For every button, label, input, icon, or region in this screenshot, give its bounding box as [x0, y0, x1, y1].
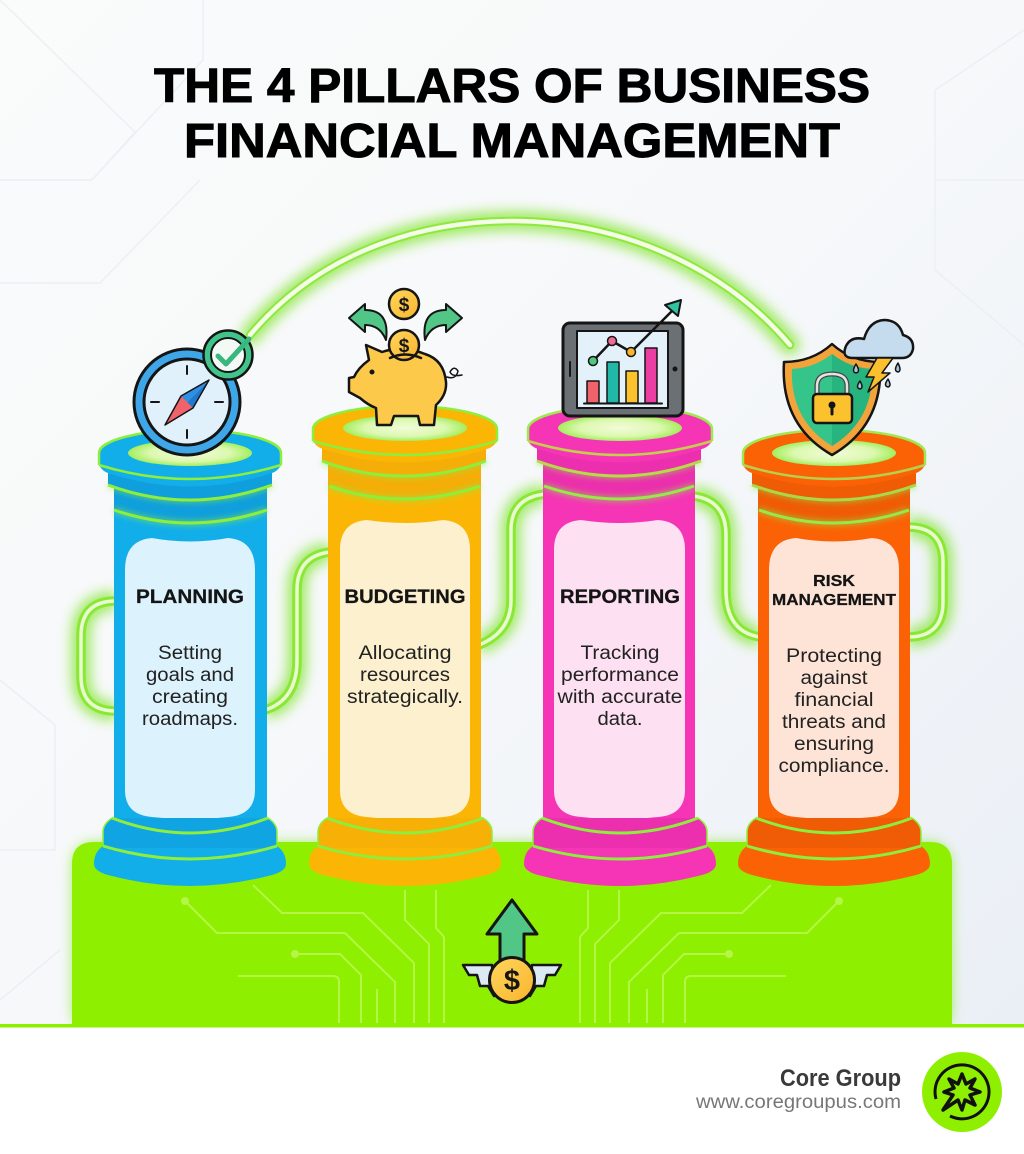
title: THE 4 PILLARS OF BUSINESS: [154, 60, 870, 113]
footer: Core Group: [780, 1065, 901, 1092]
neon arc: [250, 221, 790, 345]
base: reporting: [524, 818, 716, 886]
panel: risk management text: financial: [794, 690, 874, 711]
icon: shield with lock and storm cloud: [784, 320, 913, 455]
panel: risk management text: compliance.: [778, 756, 890, 777]
title: FINANCIAL MANAGEMENT: [184, 115, 840, 168]
panel: reporting text: performance: [561, 665, 679, 686]
panel: budgeting text: [340, 520, 470, 819]
icon: piggy bank with coins: $: [399, 336, 410, 357]
green platform: [72, 842, 952, 1032]
title: [154, 60, 870, 168]
icon: tablet with rising chart: [563, 300, 683, 416]
pillar 3: reporting: [524, 406, 716, 886]
pillar 1: planning: [94, 430, 286, 886]
footer: www.coregroupus.com: [695, 1091, 901, 1113]
panel: planning text: goals and: [146, 665, 234, 686]
panel: budgeting text: Allocating: [358, 643, 452, 664]
panel: planning text: PLANNING: [136, 587, 244, 608]
icon: winged dollar coin with up arrow: $: [504, 965, 520, 997]
circuit traces: [181, 885, 843, 1023]
panel: risk management text: against: [800, 668, 868, 689]
neon connectors between pillars: [81, 494, 943, 711]
panel: risk management text: RISK: [813, 573, 856, 590]
base: risk management: [738, 818, 930, 886]
panel: risk management text: threats and: [782, 712, 886, 733]
icon: compass with check badge: [134, 330, 252, 455]
panel: reporting text: Tracking: [580, 643, 660, 664]
icon: piggy bank with coins: [349, 289, 462, 425]
panel: planning text: roadmaps.: [142, 709, 238, 730]
pillar 2: budgeting: [309, 406, 501, 886]
footer: [0, 1028, 1024, 1154]
panel: budgeting text: strategically.: [347, 687, 463, 708]
panel: risk management text: [769, 538, 899, 819]
panel: planning text: creating: [152, 687, 228, 708]
platform bottom line: [0, 1024, 1024, 1028]
panel: risk management text: MANAGEMENT: [772, 592, 897, 609]
logo: [922, 1052, 1002, 1132]
panel: reporting text: [554, 520, 685, 819]
panel: risk management text: Protecting: [786, 646, 882, 667]
pillar 4: risk management: [738, 430, 930, 886]
icon: winged dollar coin with up arrow: [463, 900, 561, 1002]
panel: reporting text: REPORTING: [560, 587, 680, 608]
base: budgeting: [309, 818, 501, 886]
panel: reporting text: data.: [598, 709, 642, 730]
panel: budgeting text: BUDGETING: [344, 587, 466, 608]
icon: piggy bank with coins: $: [399, 295, 410, 316]
panel: planning text: Setting: [158, 643, 222, 664]
panel: budgeting text: resources: [360, 665, 450, 686]
panel: planning text: [125, 538, 255, 819]
panel: reporting text: with accurate: [556, 687, 682, 708]
base: planning: [94, 818, 286, 886]
panel: risk management text: ensuring: [794, 734, 874, 755]
